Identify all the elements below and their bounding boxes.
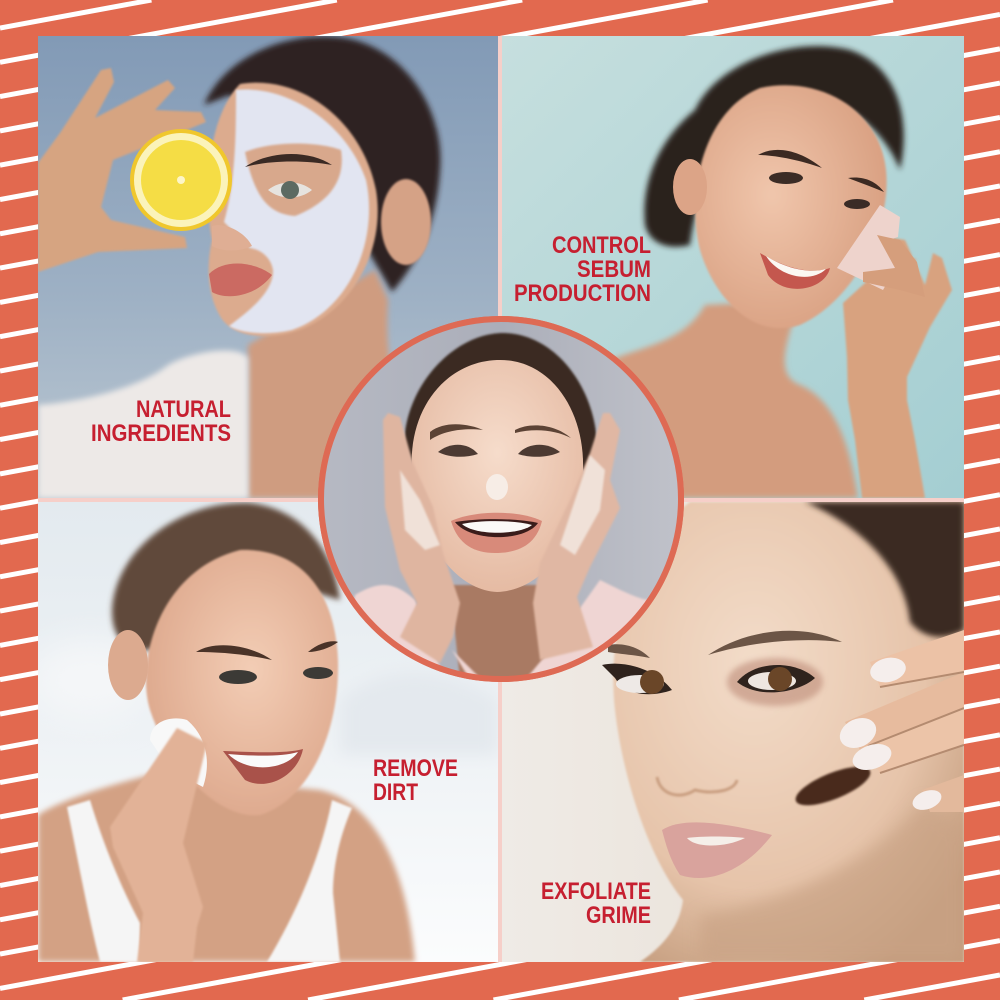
panel: exfoliate grime bbox=[502, 502, 964, 962]
face bbox=[208, 83, 378, 336]
panel: control sebum production bbox=[502, 36, 964, 498]
eyebrows bbox=[430, 424, 571, 440]
eyes bbox=[602, 664, 672, 694]
right hand with foam bbox=[533, 413, 620, 660]
ear bbox=[673, 159, 707, 215]
ear bbox=[381, 179, 431, 265]
eye area bbox=[245, 144, 342, 216]
hair bbox=[644, 46, 904, 247]
label: control sebum production: CONTROL bbox=[552, 232, 651, 259]
clay mask bbox=[224, 90, 369, 333]
eyes bbox=[438, 445, 478, 457]
label: exfoliate grime: GRIME bbox=[586, 902, 651, 929]
panel: remove dirt bbox=[30, 502, 498, 962]
label: control sebum production: SEBUM bbox=[577, 256, 651, 283]
hair bbox=[805, 502, 964, 637]
ring bbox=[321, 319, 681, 679]
shoulders and chest bbox=[38, 775, 415, 962]
eyebrows bbox=[196, 645, 272, 660]
robe bbox=[38, 351, 248, 498]
eyebrows bbox=[608, 644, 650, 658]
smile bbox=[760, 253, 830, 289]
nose bbox=[657, 777, 737, 795]
centre circle photo bbox=[318, 316, 684, 682]
label: exfoliate grime bbox=[541, 878, 651, 929]
label: remove dirt: REMOVE bbox=[373, 755, 458, 782]
lips bbox=[451, 513, 542, 553]
arm and hand bbox=[843, 235, 952, 498]
cotton pad bbox=[150, 718, 207, 787]
neck and chest bbox=[245, 268, 392, 498]
eyebrow bbox=[245, 154, 332, 167]
eyes bbox=[219, 670, 257, 684]
nose bbox=[212, 226, 252, 248]
ear bbox=[108, 630, 148, 700]
smile teeth bbox=[455, 519, 538, 537]
label: natural ingredients: INGREDIENTS bbox=[91, 420, 231, 447]
fingers with white nails bbox=[845, 630, 964, 812]
hair bbox=[204, 37, 440, 292]
face and neck bbox=[613, 502, 964, 962]
label: natural ingredients bbox=[91, 396, 231, 447]
label: exfoliate grime: EXFOLIATE bbox=[541, 878, 651, 905]
foam nose bbox=[486, 474, 508, 500]
blouse bbox=[340, 580, 650, 680]
neck bbox=[450, 585, 545, 680]
smile bbox=[223, 749, 303, 784]
lemon bbox=[130, 129, 232, 231]
scrub on cheek bbox=[791, 759, 875, 813]
cotton pad bbox=[837, 205, 900, 290]
eyebrows bbox=[758, 150, 822, 168]
label: remove dirt: DIRT bbox=[373, 779, 418, 806]
shoulders bbox=[610, 300, 858, 498]
hand bbox=[38, 68, 206, 272]
hair bbox=[112, 503, 340, 650]
eye shadow bbox=[727, 658, 823, 706]
label: remove dirt bbox=[373, 755, 458, 806]
label: control sebum production bbox=[514, 232, 651, 307]
lips bbox=[662, 822, 772, 878]
hand bbox=[110, 728, 207, 962]
neck shadow under jaw bbox=[700, 800, 964, 962]
label: natural ingredients: NATURAL bbox=[136, 396, 231, 423]
hair bbox=[404, 333, 597, 470]
pillows bbox=[346, 691, 492, 750]
face bbox=[695, 85, 887, 328]
lips bbox=[209, 264, 272, 296]
face bbox=[412, 360, 583, 592]
left hand with foam bbox=[383, 413, 460, 663]
panel: natural ingredients bbox=[38, 36, 498, 498]
fingers on pad bbox=[863, 235, 921, 287]
tank top bbox=[67, 800, 352, 962]
face bbox=[146, 550, 338, 815]
eyes bbox=[769, 172, 803, 184]
label: control sebum production: PRODUCTION bbox=[514, 280, 651, 307]
eye bbox=[268, 182, 312, 198]
